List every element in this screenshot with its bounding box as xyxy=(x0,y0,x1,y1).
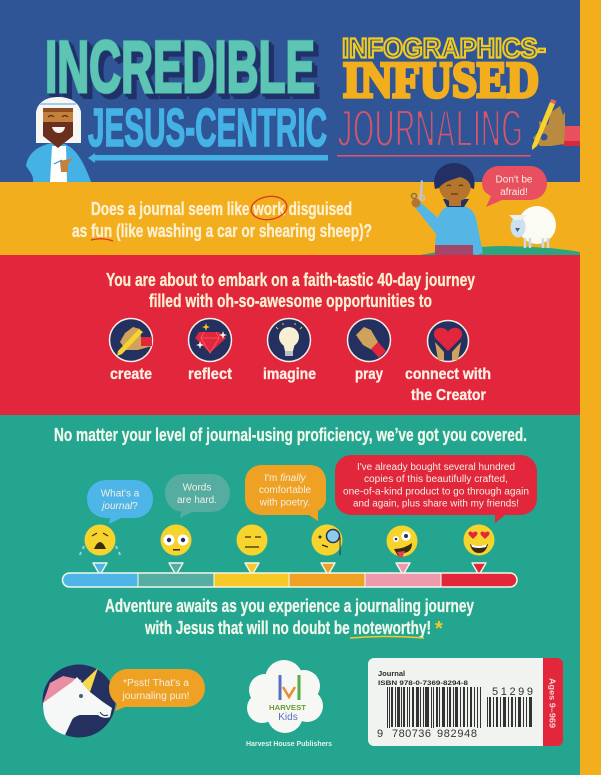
title: Incredible: INCREDIBLE xyxy=(48,30,318,110)
callout: what's a journal: journal? xyxy=(100,501,138,512)
title: Incredible: INCREDIBLE xyxy=(45,27,315,108)
icon: pray xyxy=(348,318,390,362)
label: reflect: reflect xyxy=(188,366,233,383)
text: adventure awaits xyxy=(105,596,474,638)
text: adventure awaits: with Jesus that will no doubt be noteworthy! xyxy=(144,618,431,638)
callout: don't be afraid xyxy=(482,166,547,207)
annotation: circle around work xyxy=(250,194,288,222)
callout: bought hundreds xyxy=(335,455,537,523)
label: create: create xyxy=(110,366,152,383)
callout: don't be afraid: Don't be xyxy=(496,174,533,186)
text: question: Does a journal seem like work disguised xyxy=(91,199,352,219)
icon: silly emoji xyxy=(386,526,418,558)
logo: Harvest Kids cloud: Kids xyxy=(278,712,298,723)
callout: psst: journaling pun! xyxy=(121,691,190,702)
title: Jesus-Centric: JESUS-CENTRIC xyxy=(88,98,327,158)
text: publisher: Harvest House Publishers xyxy=(246,741,332,748)
text: question: as fun (like washing a car or shearing sheep)? xyxy=(72,221,372,241)
title: Incredible: INCREDIBLE xyxy=(50,32,320,113)
icon: connect xyxy=(428,320,468,362)
title: Incredible xyxy=(45,27,320,113)
icon: create xyxy=(110,318,152,362)
callout: finally comfortable xyxy=(245,465,326,521)
callout: finally comfortable: I'm finally xyxy=(264,473,307,484)
callout: finally comfortable: with poetry. xyxy=(259,498,310,508)
annotation: underline fun xyxy=(91,239,113,241)
callout: words are hard xyxy=(165,474,230,518)
label: connect with the Creator: the Creator xyxy=(411,387,486,404)
triangle markers xyxy=(93,563,486,575)
icon: crying emoji xyxy=(80,524,120,556)
panel: yellow question band xyxy=(0,182,580,255)
label: connect with the Creator: connect with xyxy=(405,366,491,383)
text: question xyxy=(72,199,372,241)
label: pray: pray xyxy=(355,366,383,383)
panel: blue title background xyxy=(0,0,580,182)
annotation: asterisk: * xyxy=(435,618,443,640)
panel: right yellow spine strip xyxy=(580,0,601,775)
barcode label: Journal xyxy=(378,669,405,678)
barcode label: Ages 9–969 xyxy=(548,678,556,729)
text: journey intro: filled with oh-so-awesome opportunities to xyxy=(149,291,432,311)
icon: girl with scissors xyxy=(412,163,483,255)
callout: what's a journal xyxy=(87,480,153,524)
callout: words are hard: Words xyxy=(183,482,211,494)
callout: bought hundreds: one-of-a-kind product to go through again xyxy=(343,486,529,498)
icon: hand writing with pencil xyxy=(532,99,580,150)
title: Infused: INFUSED xyxy=(343,53,539,109)
label: connect with the Creator xyxy=(405,366,491,404)
icon: unicorn xyxy=(42,664,116,738)
callout: bought hundreds: and again, plus share with my friends! xyxy=(353,498,519,510)
icon: monocle emoji xyxy=(312,524,342,556)
icon: heart-eyes emoji xyxy=(464,524,494,556)
logo: Harvest Kids cloud: HARVEST xyxy=(269,703,306,712)
icon: imagine xyxy=(268,318,310,362)
logo: Harvest Kids cloud xyxy=(247,660,323,733)
barcode label: 51299 xyxy=(492,686,533,698)
barcode label: 780736 xyxy=(392,728,431,740)
text: journey intro xyxy=(106,270,475,311)
panel: teal proficiency section xyxy=(0,415,580,775)
callout: psst xyxy=(109,669,205,711)
panel: red opportunities band xyxy=(0,255,580,415)
icon: sheep xyxy=(509,206,556,248)
callout: words are hard: are hard. xyxy=(177,495,217,506)
arrow: pointing left to Jesus xyxy=(88,153,328,163)
barcode label: 9 xyxy=(377,728,383,740)
annotation: noteworthy underline xyxy=(350,636,424,638)
underline: journaling xyxy=(337,155,531,157)
icon: wide-eyed emoji xyxy=(160,524,192,556)
text: adventure awaits: Adventure awaits as you experience a journaling journey xyxy=(105,596,474,616)
label: imagine: imagine xyxy=(263,366,316,383)
icon: neutral emoji xyxy=(236,524,268,556)
callout: don't be afraid: afraid! xyxy=(500,187,528,198)
title: Infographics-: INFOGRAPHICS- xyxy=(342,32,546,64)
text: journey intro: You are about to embark on a faith-tastic 40-day journey xyxy=(106,270,475,290)
chart: proficiency scale bar xyxy=(62,573,517,587)
illustration: green hill xyxy=(420,246,580,255)
barcode label: 982948 xyxy=(437,728,477,740)
callout: bought hundreds: copies of this beautifully crafted, xyxy=(364,474,508,485)
icon: reflect xyxy=(188,318,232,362)
barcode label xyxy=(368,658,563,746)
barcode label: ISBN 978-0-7369-8294-8 xyxy=(378,680,468,687)
callout: bought hundreds: I've already bought several hundred xyxy=(357,462,515,473)
callout: psst: *Psst! That's a xyxy=(123,678,189,689)
callout: finally comfortable: comfortable xyxy=(259,485,312,496)
icon: Jesus character xyxy=(26,97,91,182)
title: Incredible: INCREDIBLE xyxy=(45,27,315,108)
callout: what's a journal: What's a xyxy=(101,488,140,500)
